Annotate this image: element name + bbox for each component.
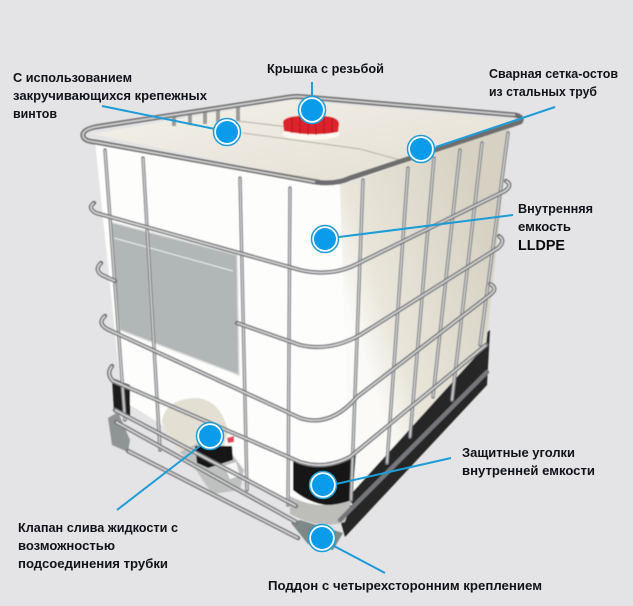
marker: corners (310, 472, 336, 498)
tank: black left corner protector (112, 378, 130, 420)
label: valve: возможностью (18, 538, 115, 553)
frame: top rim highlight (83, 96, 515, 182)
label: cap: Крышка с резьбой (267, 61, 384, 76)
label: screws: С использованием (13, 70, 132, 85)
illustration: IBC container (83, 96, 521, 550)
frame: vertical wire highlights (105, 133, 508, 505)
leader lines (102, 82, 555, 573)
label: pallet: Поддон с четырехсторонним креплением (268, 578, 542, 593)
label: screws: винтов (13, 106, 57, 121)
tank: screw brackets on back rim (172, 107, 240, 126)
label: corners: внутренней емкости (462, 463, 595, 478)
label: inner tank (518, 201, 593, 254)
label: valve (18, 520, 178, 571)
marker: frame (408, 136, 434, 162)
label: inner tank: LLDPE (518, 238, 565, 254)
frame: top rim (83, 96, 521, 183)
label: valve: Клапан слива жидкости с (18, 520, 178, 535)
cap: red screw lid (282, 116, 340, 140)
marker: cap (298, 96, 326, 124)
tank: left face (95, 142, 352, 505)
pallet: foot front (291, 520, 343, 550)
label: screws: закручивающихся крепежных (13, 88, 208, 103)
label: frame: Сварная сетка-остов (489, 66, 618, 81)
frame: horizontal rails (91, 181, 509, 538)
frame: rail highlights (91, 181, 509, 538)
tank: top face (92, 100, 516, 184)
label: frame: из стальных труб (489, 84, 597, 99)
marker: screws (214, 118, 240, 146)
label: screws (13, 70, 208, 121)
tank: black corner protector (293, 453, 356, 506)
pallet: black base on right side (336, 330, 490, 537)
marker: valve (196, 422, 224, 450)
label plate (110, 222, 239, 375)
tank: lower lip (290, 496, 352, 525)
label: inner tank: Внутренняя (518, 201, 593, 216)
marker: pallet (308, 524, 336, 552)
tank: top ridges (100, 121, 400, 180)
label: valve: подсоединения трубки (18, 556, 168, 571)
marker: tank (312, 226, 338, 252)
label: corners: Защитные уголки (462, 445, 575, 460)
frame: vertical wires (105, 133, 508, 505)
tank: right face (340, 124, 510, 495)
label: frame (489, 66, 618, 99)
label: corners (462, 445, 595, 478)
valve: dome, black body and silver fitting (162, 398, 244, 494)
label: inner tank: емкость (518, 219, 571, 234)
pallet: foot left (108, 412, 130, 452)
